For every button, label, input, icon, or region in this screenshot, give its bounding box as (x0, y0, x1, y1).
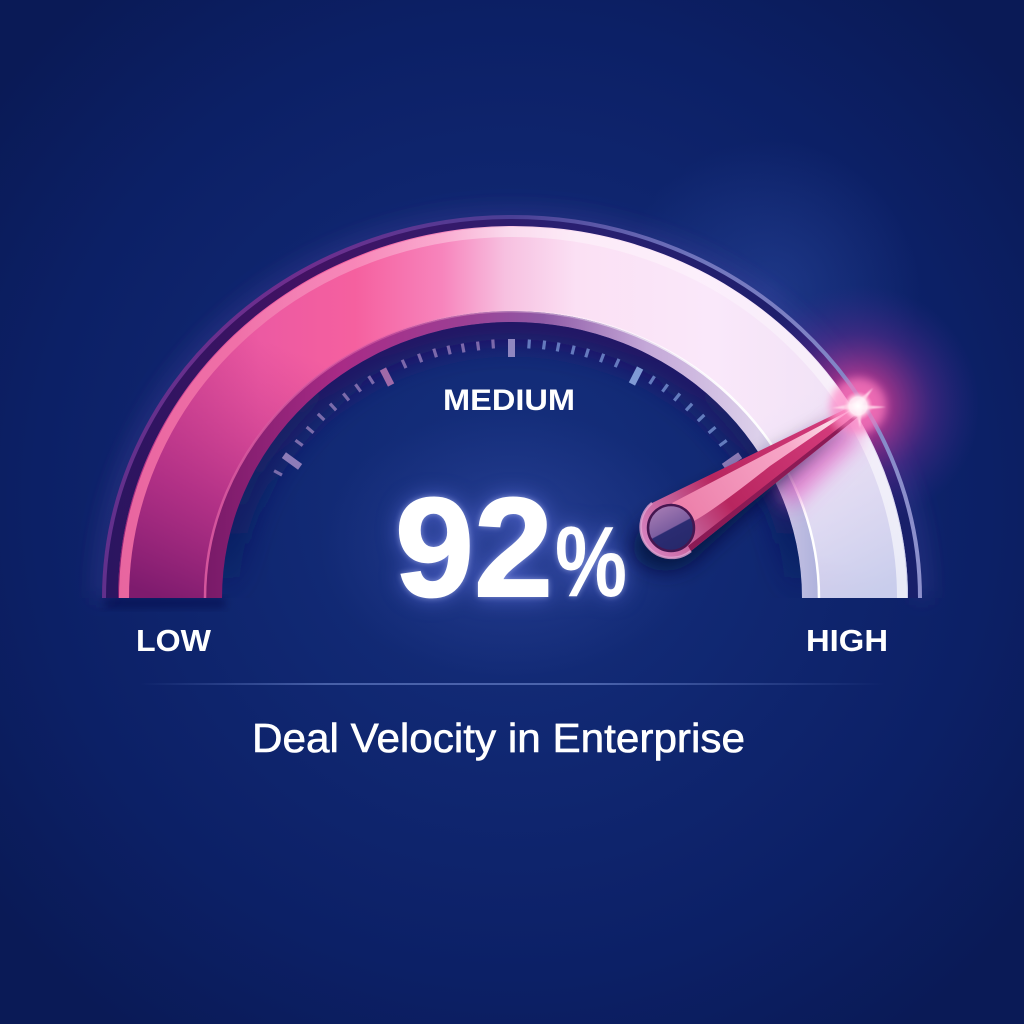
hub ring highlight (641, 503, 691, 558)
gauge dark gap band (102, 217, 922, 598)
dial center glow (320, 410, 700, 680)
gauge face right shading (118, 226, 908, 598)
scale ticks (273, 339, 742, 476)
background glow (620, 140, 920, 440)
needle (633, 404, 858, 571)
divider (140, 683, 885, 685)
needle light facet (672, 407, 856, 522)
needle tip flare (830, 378, 886, 434)
value 92 percent (395, 468, 627, 626)
caption: Deal Velocity in Enterprise (252, 715, 745, 761)
gauge base shadow (105, 598, 225, 608)
hub cap (648, 505, 694, 551)
gauge face (118, 226, 908, 598)
low label: LOW (136, 623, 212, 658)
percent sign: % (555, 506, 627, 618)
blush under needle (770, 412, 860, 510)
gauge (102, 217, 980, 608)
gauge outer highlight (124, 232, 902, 598)
gauge outer glow (102, 217, 922, 598)
flare soft bloom (830, 378, 886, 434)
gauge face left shading (118, 226, 908, 598)
flare core (843, 391, 873, 421)
needle lower dark edge (688, 416, 858, 551)
tip halo (740, 285, 980, 525)
gauge bevel highlight line (205, 311, 819, 598)
value digits: 92 (395, 468, 553, 626)
minor ticks left (273, 339, 495, 476)
gauge thin outer rim (104, 217, 920, 598)
gauge inner dial (224, 322, 802, 630)
flare star rays (832, 388, 886, 428)
medium label: MEDIUM (443, 384, 575, 417)
high label: HIGH (806, 623, 888, 658)
minor ticks right (527, 339, 728, 447)
needle body (641, 404, 858, 558)
needle shadow (633, 418, 850, 571)
major ticks (282, 339, 742, 470)
dial edge shading (224, 322, 802, 580)
gauge inner bevel (205, 311, 819, 598)
